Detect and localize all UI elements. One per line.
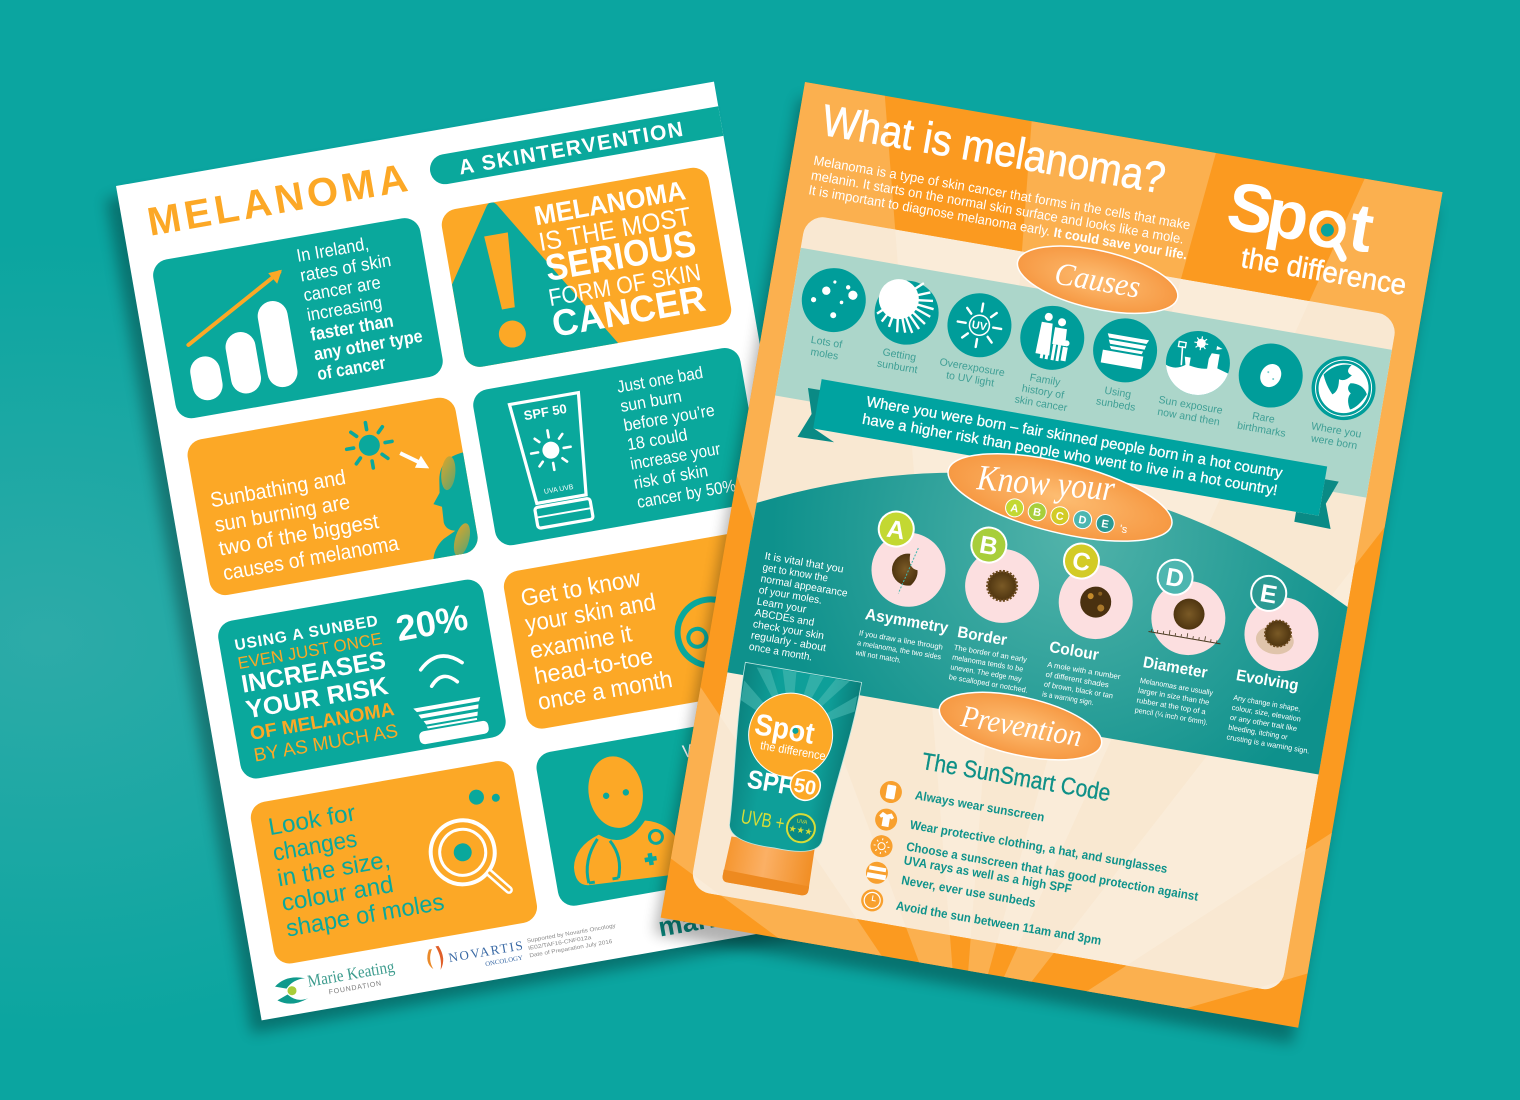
- badge: Know your ABCDEs: 's: [1119, 523, 1129, 536]
- heading: MELANOMA: MELANOMA: [144, 156, 411, 245]
- text block: CANCER: [549, 278, 709, 345]
- UVB UVA label: UVA: [796, 818, 808, 826]
- A: asymmetry: If you draw a line through: [858, 628, 944, 652]
- item: choose sunscreen: [868, 833, 1200, 918]
- text block: head-to-toe: [532, 643, 655, 690]
- icon: doctor: [556, 747, 687, 892]
- text block: cancer by 50%: [636, 476, 737, 512]
- E: evolving: bleeding, itching or: [1228, 723, 1289, 742]
- text block: BY AS MUCH AS: [252, 721, 400, 767]
- text block: colour and: [280, 871, 395, 917]
- icon: sunscreen tube: SPF 50: [523, 401, 568, 423]
- SPF 50 label: SPF: [745, 764, 796, 801]
- intro text: melanin. It starts on the normal skin surface and looks like a mole.: [810, 168, 1185, 247]
- D: diameter: Diameter: [1142, 654, 1209, 682]
- text block: any other type: [312, 326, 424, 364]
- cause: rare birthmarks: [1229, 339, 1308, 441]
- cause: rare birthmarks: birthmarks: [1236, 420, 1287, 440]
- item: avoid sun: [859, 888, 1103, 951]
- E: evolving: or any other trait like: [1229, 713, 1298, 733]
- section: causes: [802, 268, 1376, 450]
- text block: MELANOMA: [532, 175, 688, 231]
- text block: rates of skin: [298, 250, 393, 286]
- item: clothing: [873, 807, 1169, 879]
- text block: 18 could: [626, 425, 689, 454]
- text block: INCREASES: [239, 646, 388, 699]
- E: evolving: colour, size, elevation: [1231, 703, 1302, 724]
- text block: IS THE MOST: [536, 201, 693, 257]
- SPF 50 label: 50: [792, 775, 818, 800]
- icon: rising bars and arrow: [175, 270, 302, 403]
- text block: before you’re: [622, 401, 716, 435]
- intro text: of your moles.: [758, 584, 823, 607]
- icon: fingerprint ring: [672, 594, 749, 671]
- C: colour: of different shades: [1045, 670, 1110, 689]
- icon: warning triangle: [452, 202, 618, 367]
- text block: [518, 563, 674, 716]
- cause: family history: [1008, 301, 1089, 415]
- item: choose sunscreen: UVA rays as well as a high SPF: [903, 853, 1073, 896]
- cause: family history: history of: [1021, 382, 1065, 402]
- badge: Causes: Causes: [1052, 255, 1143, 305]
- badge: Causes: [1010, 233, 1185, 327]
- cause: overexposure to UV: to UV light: [945, 369, 995, 389]
- cause: where you were born: Where you: [1310, 420, 1362, 441]
- cause: using sunbeds: [1083, 313, 1162, 416]
- cause: sun exposure now and then: [1158, 331, 1230, 426]
- badge: Know your ABCDEs: D: [1077, 514, 1087, 527]
- UVB UVA label: UVB +: [739, 806, 786, 835]
- B: border: melanoma tends to be: [952, 653, 1024, 674]
- icon: sunscreen tube: UVA UVB: [544, 484, 574, 496]
- A: asymmetry: A: [885, 515, 907, 545]
- cause: where you were born: [1302, 351, 1381, 454]
- text block: changes: [271, 826, 359, 867]
- text block: risk of skin: [632, 461, 709, 493]
- item: sunscreen: Always wear sunscreen: [914, 788, 1046, 824]
- panel: know your skin: [501, 527, 797, 731]
- shadow: right poster: [655, 98, 1437, 1044]
- text block: FORM OF SKIN: [547, 259, 703, 312]
- panel: sunbed risk: [216, 577, 508, 781]
- text block: USING A SUNBED: [233, 613, 379, 654]
- panel: see your doctor: [534, 708, 829, 908]
- cause: using sunbeds: Using: [1104, 385, 1132, 401]
- item: choose sunscreen: Choose a sunscreen that has good protection against: [905, 840, 1200, 904]
- panel: one bad sun burn: [471, 345, 765, 548]
- B: border: uneven. The edge may: [950, 662, 1023, 684]
- text block: EVEN JUST ONCE: [236, 629, 383, 673]
- UVB UVA label: [738, 804, 817, 844]
- cause: lots of moles: [792, 263, 871, 366]
- text block: shape of moles: [284, 888, 446, 943]
- A: asymmetry: [854, 508, 966, 672]
- support credit: Supported by Novartis Oncology: [527, 923, 616, 945]
- A: asymmetry: will not match.: [854, 648, 902, 665]
- panel: look for changes: [248, 759, 540, 966]
- text block: In Ireland,: [295, 234, 370, 266]
- icon: sun: [343, 419, 396, 472]
- tube logo: [742, 687, 839, 784]
- poster: Melanoma, a skintervention: [116, 82, 760, 1020]
- intro text: normal appearance: [760, 573, 849, 600]
- cause: using sunbeds: sunbeds: [1095, 395, 1136, 414]
- icon: sunscreen tube: [509, 393, 600, 530]
- text block: Look for: [266, 799, 358, 841]
- C: colour: Colour: [1048, 639, 1100, 664]
- intro text: It is important to diagnose melanoma early. It could save your life.: [807, 182, 1188, 262]
- text block: SERIOUS: [542, 223, 699, 289]
- cause: overexposure to UV: Overexposure: [939, 356, 1006, 379]
- B: border: Border: [956, 624, 1008, 649]
- badge: Prevention: [932, 679, 1109, 773]
- text block: two of the biggest: [217, 510, 381, 561]
- cause: lots of moles: moles: [810, 346, 839, 363]
- intro text: ABCDEs and: [754, 607, 815, 629]
- heading: The SunSmart Code: [920, 748, 1113, 807]
- intro text: regularly - about: [750, 629, 827, 654]
- item: sunbeds: [864, 860, 1038, 911]
- ribbon: where you were born: have a higher risk than people who went to live in a hot country!: [861, 411, 1279, 499]
- cause: lots of moles: Lots of: [810, 334, 843, 351]
- cause: sun exposure now and then: now and then: [1156, 406, 1221, 428]
- intro text: Learn your: [756, 595, 808, 616]
- logo: Novartis: [425, 932, 525, 978]
- icon: magnifier over moles: [421, 786, 516, 902]
- text block: sun burn: [619, 387, 683, 416]
- tube logo: Spot: [752, 708, 817, 751]
- cause: getting sunburnt: [865, 276, 944, 378]
- UVB UVA label: ★★★: [788, 823, 813, 837]
- D: diameter: D: [1164, 563, 1186, 594]
- text block: once a month: [536, 666, 674, 716]
- support credit: IE02/TAF16-CNF012a: [528, 935, 593, 952]
- B: border: be scalloped or notched.: [948, 672, 1028, 695]
- logo: Novartis: NOVARTIS: [447, 938, 524, 965]
- D: diameter: rubber at the top of a: [1136, 696, 1207, 716]
- logo: Marie Keating: Marie Keating: [306, 957, 396, 991]
- sun rays: [671, 82, 1442, 1008]
- cause: family history: Family: [1029, 372, 1062, 389]
- ribbon: where you were born: [797, 377, 1341, 529]
- badge: Know your ABCDEs: B: [1032, 506, 1042, 519]
- section: SunSmart code: [859, 742, 1216, 966]
- SPF 50 label: [745, 761, 823, 806]
- cause: family history: skin cancer: [1014, 393, 1069, 414]
- panel: sunbathing: [185, 394, 485, 602]
- text block: Just one bad: [615, 363, 704, 397]
- C: colour: [1040, 541, 1142, 711]
- badge: Know your ABCDEs: C: [1055, 510, 1065, 523]
- arrow: sun to head: [400, 449, 429, 473]
- footer: logos: [273, 891, 762, 1009]
- text block: [531, 175, 709, 345]
- logo: Spot the difference: p: [1261, 174, 1315, 256]
- item: avoid sun: Avoid the sun between 11am and 3pm: [895, 899, 1102, 948]
- badge: Know your ABCDEs: Know your: [975, 457, 1117, 509]
- item: clothing: Wear protective clothing, a hat, and sunglasses: [909, 818, 1169, 876]
- badge: Know your ABCDEs: A: [1009, 502, 1019, 515]
- item: sunbeds: Never, ever use sunbeds: [900, 873, 1037, 910]
- text block: increasing: [305, 292, 384, 325]
- B: border: The border of an early: [953, 643, 1028, 664]
- text block: YOUR RISK: [244, 672, 390, 724]
- cause: sun exposure now and then: Sun exposure: [1158, 394, 1224, 417]
- E: evolving: Any change in shape,: [1233, 693, 1301, 713]
- text block: OF MELANOMA: [249, 699, 396, 745]
- ribbon: where you were born: Where you were born – fair skinned people born in a hot country: [865, 393, 1284, 482]
- banner: A Skintervention: [428, 106, 723, 187]
- E: evolving: Evolving: [1235, 667, 1300, 695]
- intro text: Melanoma is a type of skin cancer that forms in the cells that make: [813, 153, 1192, 233]
- A: asymmetry: Asymmetry: [864, 606, 950, 637]
- text block: [266, 787, 446, 943]
- logo: Spot the difference: o: [1301, 183, 1355, 265]
- text block: sun burning are: [213, 491, 352, 537]
- web address: marie.ie: [656, 895, 762, 943]
- E: evolving: E: [1258, 579, 1279, 610]
- intro text: [748, 550, 853, 668]
- text block: Get to know: [519, 565, 643, 612]
- logo: Spot the difference: S: [1222, 167, 1279, 250]
- intro text: check your skin: [752, 618, 825, 642]
- cause: getting sunburnt: Getting: [882, 346, 917, 364]
- C: colour: of brown, black or tan: [1043, 680, 1114, 700]
- badge: Know your ABCDEs: E: [1100, 518, 1110, 531]
- text block: faster than: [309, 310, 395, 345]
- cause: rare birthmarks: Rare: [1251, 410, 1276, 426]
- C: colour: A mole with a number: [1047, 660, 1122, 681]
- shadow: left poster: [106, 95, 850, 1033]
- intro text: once a month.: [748, 641, 813, 664]
- panel: rates increasing: [151, 216, 445, 421]
- B: border: [948, 525, 1054, 695]
- badge: Know your ABCDEs: [937, 435, 1183, 560]
- logo: Spot the difference: t: [1344, 188, 1379, 267]
- intro text: It is vital that you: [764, 550, 845, 576]
- item: sunscreen: [878, 779, 1046, 829]
- panel: most serious form: [439, 165, 734, 373]
- D: diameter: Melanomas are usually: [1139, 676, 1214, 697]
- E: evolving: crusting is a warning sign.: [1226, 732, 1310, 756]
- section: know your ABCDEs, teal dome: [727, 431, 1360, 775]
- cause: overexposure to UV: [937, 288, 1018, 391]
- support credit: Date of Preparation July 2016: [529, 939, 613, 959]
- text block: [233, 612, 400, 767]
- banner: A Skintervention: A SKINTERVENTION: [457, 118, 685, 180]
- icon: sunbed: [405, 650, 490, 745]
- logo: Spot the difference: the difference: [1239, 242, 1409, 302]
- text block: Sunbathing and: [209, 466, 347, 512]
- logo: Spot the difference: [1217, 167, 1421, 302]
- text block: [295, 227, 427, 384]
- C: colour: is a warning sign.: [1042, 689, 1094, 707]
- logo: Marie Keating: [273, 957, 398, 1006]
- D: diameter: larger in size than the: [1138, 686, 1210, 707]
- E: evolving: [1225, 573, 1338, 756]
- badge: Prevention: Prevention: [958, 698, 1085, 753]
- D: diameter: [1134, 557, 1234, 727]
- text block: increase your: [629, 439, 722, 474]
- text fragment: When: [681, 734, 731, 762]
- stat: 20%: 20%: [393, 596, 471, 649]
- text block: your skin and: [523, 589, 658, 638]
- illustration: SPF 50 sunscreen tube: [708, 662, 862, 899]
- text block: [615, 361, 737, 512]
- cause: getting sunburnt: sunburnt: [876, 357, 918, 376]
- heading: What is melanoma?: [819, 96, 1169, 203]
- D: diameter: pencil (¼ inch or 6mm).: [1134, 705, 1209, 727]
- text block: examine it: [528, 620, 634, 665]
- cause: where you were born: were born: [1309, 432, 1358, 452]
- icon: head with moles: [434, 452, 478, 559]
- text block: in the size,: [275, 846, 392, 892]
- logo: Marie Keating: FOUNDATION: [328, 980, 382, 996]
- tube logo: the difference: [759, 738, 827, 763]
- text block: of cancer: [316, 352, 387, 384]
- cause: overexposure to UV: UV: [971, 319, 988, 334]
- text block: [209, 459, 401, 585]
- text block: cancer are: [302, 272, 382, 305]
- B: border: B: [977, 531, 1000, 561]
- A: asymmetry: a melanoma, the two sides: [857, 638, 942, 662]
- logo: Novartis: ONCOLOGY: [485, 955, 524, 968]
- support credit: [527, 923, 619, 959]
- panel: cream background: [692, 217, 1395, 990]
- poster: What is melanoma: [643, 82, 1443, 1100]
- text block: causes of melanoma: [221, 532, 401, 585]
- intro text: get to know the: [762, 561, 829, 585]
- C: colour: C: [1070, 547, 1093, 577]
